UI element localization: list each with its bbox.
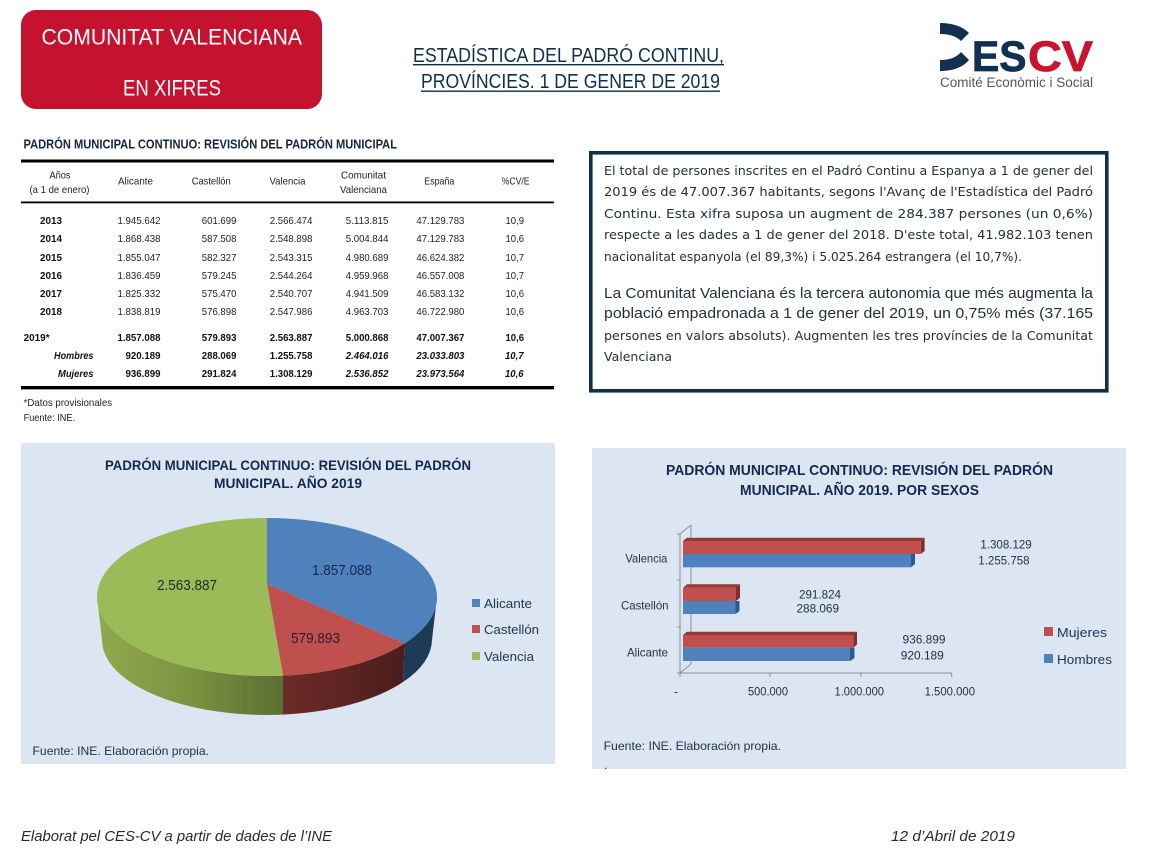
row Mujeres: 10,6 bbox=[505, 368, 524, 380]
row 2014: 587.508 bbox=[202, 233, 237, 245]
row 2013: 2013 bbox=[40, 215, 62, 227]
bars: Alicante bbox=[683, 632, 857, 661]
paragraph: Comunitat Valenciana: població empadronada a 1 de gener del 2019, un 0,75% més (37.165 bbox=[604, 305, 1093, 322]
bar legend: Hombres bbox=[1057, 652, 1113, 667]
row 2019: 579.893 bbox=[202, 332, 237, 344]
row Mujeres: Mujeres bbox=[58, 368, 94, 380]
bar data labels: 1.255.758 bbox=[978, 554, 1030, 568]
row 2014: 2.548.898 bbox=[270, 233, 313, 245]
table notes bbox=[24, 397, 112, 424]
row 2016: 2016 bbox=[40, 270, 62, 282]
row 2014: 1.868.438 bbox=[118, 233, 161, 245]
footer: author note: Elaborat pel CES-CV a partir de dades de l’INE bbox=[21, 828, 333, 845]
row 2013 bbox=[40, 215, 524, 227]
row 2013: 2.566.474 bbox=[270, 215, 313, 227]
row 2018: 4.963.703 bbox=[346, 306, 389, 318]
row 2013: 47.129.783 bbox=[416, 215, 465, 227]
table header row: Valencia bbox=[270, 176, 306, 188]
3D pie: 1.857.088 bbox=[312, 563, 372, 579]
row 2015: 46.624.382 bbox=[416, 252, 465, 264]
table header row: España bbox=[424, 176, 454, 188]
row Mujeres: 23.973.564 bbox=[415, 368, 465, 380]
panel: bar chart bbox=[592, 448, 1126, 772]
row 2019: 2.563.887 bbox=[270, 332, 313, 344]
row 2016: 579.245 bbox=[202, 270, 237, 282]
data table bbox=[21, 160, 554, 389]
row 2017: 46.583.132 bbox=[416, 288, 465, 300]
row 2018: 2018 bbox=[40, 306, 62, 318]
row 2019: 1.857.088 bbox=[118, 332, 161, 344]
row 2017: 1.825.332 bbox=[118, 288, 161, 300]
table title: PADRÓN MUNICIPAL CONTINUO: REVISIÓN DEL PADRÓN MUNICIPAL bbox=[24, 136, 397, 152]
row 2019: 5.000.868 bbox=[346, 332, 389, 344]
bar data labels: 288.069 bbox=[796, 602, 839, 616]
row Mujeres: 1.308.129 bbox=[270, 368, 313, 380]
row Hombres: 920.189 bbox=[126, 350, 161, 362]
row 2014: 10,6 bbox=[506, 233, 524, 245]
row Hombres bbox=[54, 350, 525, 362]
paragraph: Comunitat Valenciana: Valenciana bbox=[604, 350, 672, 364]
row Hombres: 2.464.016 bbox=[345, 350, 389, 362]
bar source note: . bbox=[604, 758, 607, 772]
table header row bbox=[30, 169, 530, 196]
3D pie bbox=[97, 518, 437, 715]
3D pie: 2.563.887 bbox=[157, 578, 217, 594]
bar data labels bbox=[796, 538, 1032, 662]
value axis labels bbox=[674, 684, 975, 698]
row 2017: 2.540.707 bbox=[270, 288, 313, 300]
paragraph: national total: El total de persones inscrites en el Padró Continu a Espanya a 1 de gener del bbox=[604, 164, 1093, 178]
row 2018: 2.547.986 bbox=[270, 306, 313, 318]
row Mujeres: 291.824 bbox=[202, 368, 237, 380]
table header row: Años bbox=[50, 169, 70, 181]
paragraph: national total: nacionalitat espanyola (el 89,3%) i 5.025.264 estrangera (el 10,7%). bbox=[604, 250, 1022, 264]
row 2016: 46.557.008 bbox=[416, 270, 465, 282]
row 2015: 582.327 bbox=[202, 252, 237, 264]
pie legend: Valencia bbox=[484, 649, 535, 664]
pie legend: Alicante bbox=[484, 596, 532, 611]
bar legend bbox=[1044, 625, 1113, 667]
bar data labels: 920.189 bbox=[901, 648, 944, 662]
table header row: %CV/E bbox=[502, 176, 530, 188]
row Hombres: Hombres bbox=[54, 350, 94, 362]
row 2018: 10,6 bbox=[506, 306, 524, 318]
value axis labels: - bbox=[674, 684, 678, 698]
3D pie: 579.893 bbox=[291, 631, 340, 647]
page title: ESTADÍSTICA DEL PADRÓ CONTINU, bbox=[413, 44, 724, 67]
paragraph: Comunitat Valenciana bbox=[604, 285, 1094, 364]
paragraph: Comunitat Valenciana: La Comunitat Valenciana és la tercera autonomia que més augmenta la bbox=[604, 285, 1094, 302]
bar data labels: 936.899 bbox=[902, 632, 946, 646]
page title: PROVÍNCIES. 1 DE GENER DE 2019 bbox=[421, 70, 720, 93]
category labels bbox=[621, 552, 668, 660]
row 2019: 10,6 bbox=[506, 332, 524, 344]
row 2018: 46.722.980 bbox=[416, 306, 465, 318]
paragraph: national total: Continu. Esta xifra suposa un augment de 284.387 persones (un 0,6%) bbox=[604, 207, 1093, 221]
row 2016: 1.836.459 bbox=[118, 270, 161, 282]
bar data labels: 291.824 bbox=[799, 588, 841, 602]
row Mujeres: 2.536.852 bbox=[345, 368, 389, 380]
value axis labels: 1.500.000 bbox=[925, 684, 975, 698]
logo: CES CV: ES bbox=[972, 33, 1026, 81]
row 2018: 576.898 bbox=[202, 306, 237, 318]
row 2013: 1.945.642 bbox=[118, 215, 161, 227]
page title bbox=[413, 44, 724, 93]
bar chart axes bbox=[677, 525, 952, 677]
footer: date: 12 d’Abril de 2019 bbox=[891, 828, 1016, 845]
row 2018 bbox=[40, 306, 524, 318]
row 2015 bbox=[40, 252, 524, 264]
header badge: Comunitat Valenciana en xifres bbox=[21, 10, 322, 109]
row 2015: 2015 bbox=[40, 252, 62, 264]
logo: CES CV bbox=[940, 23, 1093, 90]
row Hombres: 10,7 bbox=[505, 350, 525, 362]
row Mujeres: 936.899 bbox=[126, 368, 161, 380]
row 2017: 4.941.509 bbox=[346, 288, 389, 300]
row 2016: 2.544.264 bbox=[270, 270, 313, 282]
row 2015: 4.980.689 bbox=[346, 252, 389, 264]
row 2013: 601.699 bbox=[202, 215, 237, 227]
panel: summary text box bbox=[591, 153, 1107, 391]
table header row: Castellón bbox=[192, 176, 231, 188]
bar chart title bbox=[666, 461, 1053, 499]
row 2018: 1.838.819 bbox=[118, 306, 161, 318]
value axis labels: 500.000 bbox=[748, 684, 788, 698]
bars: Valencia bbox=[683, 538, 925, 567]
row 2016: 10,7 bbox=[506, 270, 524, 282]
category labels: Alicante bbox=[627, 646, 668, 660]
row 2019: 2019* bbox=[24, 332, 50, 344]
paragraph: Comunitat Valenciana: persones en valors absoluts). Augmenten les tres províncies de la Comunitat bbox=[604, 329, 1093, 343]
row 2014: 47.129.783 bbox=[416, 233, 465, 245]
bar legend: Mujeres bbox=[1057, 625, 1108, 640]
header badge: Comunitat Valenciana en xifres: COMUNITAT VALENCIANA bbox=[42, 24, 302, 50]
paragraph: national total: respecte a les dades a 1 de gener del 2018. D'este total, 41.982.103 tenen bbox=[604, 228, 1093, 242]
bar data labels: 1.308.129 bbox=[980, 538, 1032, 552]
header badge: Comunitat Valenciana en xifres: EN XIFRES bbox=[123, 76, 221, 100]
pie chart title: MUNICIPAL. AÑO 2019 bbox=[214, 474, 362, 491]
row Mujeres bbox=[58, 368, 524, 380]
row 2013: 5.113.815 bbox=[346, 215, 389, 227]
row 2014: 5.004.844 bbox=[346, 233, 389, 245]
row 2017: 2017 bbox=[40, 288, 62, 300]
table notes: *Datos provisionales bbox=[24, 397, 112, 409]
paragraph: national total: 2019 és de 47.007.367 habitants, segons l'Avanç de l'Estadística del Padró bbox=[604, 185, 1093, 199]
pie legend: Castellón bbox=[484, 622, 539, 637]
logo: CES CV: CV bbox=[1028, 33, 1093, 81]
logo: CES CV: Comité Econòmic i Social bbox=[940, 75, 1093, 90]
bar source note bbox=[604, 739, 781, 772]
value axis labels: 1.000.000 bbox=[834, 684, 884, 698]
row 2015: 2.543.315 bbox=[270, 252, 313, 264]
pie chart title: PADRÓN MUNICIPAL CONTINUO: REVISIÓN DEL PADRÓN bbox=[105, 456, 471, 473]
table header row: (a 1 de enero) bbox=[30, 184, 90, 196]
row 2017 bbox=[40, 288, 524, 300]
row 2014 bbox=[40, 233, 524, 245]
row 2013: 10,9 bbox=[506, 215, 524, 227]
paragraph: national total bbox=[604, 164, 1093, 264]
panel: pie chart bbox=[21, 443, 555, 764]
row Hombres: 1.255.758 bbox=[270, 350, 313, 362]
row 2015: 1.855.047 bbox=[118, 252, 161, 264]
bars: Castellón bbox=[683, 584, 740, 614]
bar chart title: PADRÓN MUNICIPAL CONTINUO: REVISIÓN DEL PADRÓN bbox=[666, 461, 1053, 479]
row 2017: 575.470 bbox=[202, 288, 237, 300]
row 2017: 10,6 bbox=[506, 288, 524, 300]
row 2019 bbox=[24, 332, 524, 344]
pie chart title bbox=[105, 456, 471, 491]
category labels: Valencia bbox=[625, 552, 668, 566]
row 2015: 10,7 bbox=[506, 252, 524, 264]
row 2016: 4.959.968 bbox=[346, 270, 389, 282]
table notes: Fuente: INE. bbox=[24, 412, 75, 424]
row Hombres: 23.033.803 bbox=[415, 350, 465, 362]
table header row: Valenciana bbox=[340, 184, 387, 196]
table header row: Alicante bbox=[118, 176, 153, 188]
row Hombres: 288.069 bbox=[202, 350, 237, 362]
row 2016 bbox=[40, 270, 524, 282]
row 2019: 47.007.367 bbox=[416, 332, 465, 344]
row 2014: 2014 bbox=[40, 233, 62, 245]
category labels: Castellón bbox=[621, 598, 668, 612]
pie source note: Fuente: INE. Elaboración propia. bbox=[32, 744, 209, 758]
table header row: Comunitat bbox=[341, 169, 386, 181]
bar source note: Fuente: INE. Elaboración propia. bbox=[604, 739, 781, 753]
pie legend bbox=[472, 596, 539, 664]
bar chart title: MUNICIPAL. AÑO 2019. POR SEXOS bbox=[740, 481, 979, 499]
